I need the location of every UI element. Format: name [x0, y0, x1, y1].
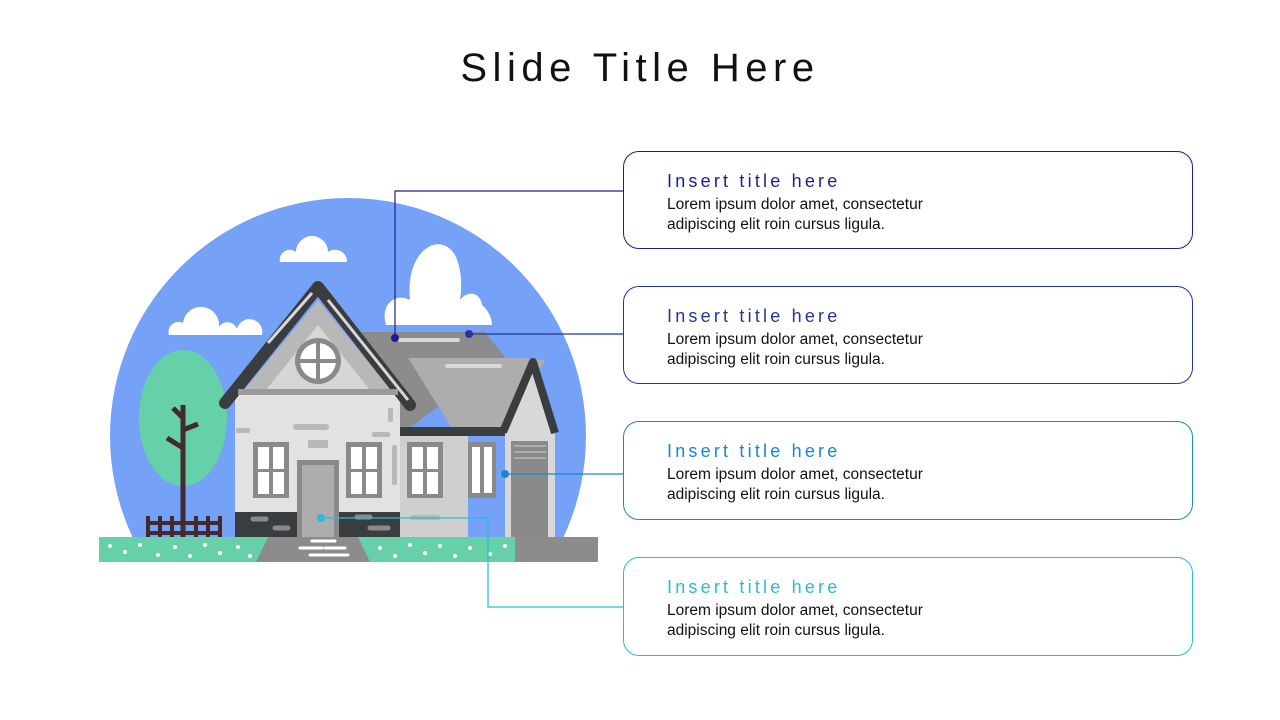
panel 4: adipiscing elit roin cursus ligula. [667, 622, 885, 638]
title: Slide Title Here [460, 46, 820, 90]
windows [253, 442, 443, 498]
ground [99, 537, 598, 562]
panel 4 [623, 557, 1193, 656]
panel 1: Insert title here [667, 171, 840, 191]
connector lines [321, 191, 623, 607]
panel 2 [623, 286, 1193, 384]
clouds [169, 236, 492, 335]
tree [139, 350, 227, 537]
panel 2: adipiscing elit roin cursus ligula. [667, 350, 885, 368]
panel 3 [623, 421, 1193, 520]
panel 1: Lorem ipsum dolor amet, consectetur [667, 196, 923, 213]
panel 4: Insert title here [667, 577, 840, 597]
panel 4: Lorem ipsum dolor amet, consectetur [667, 602, 923, 619]
base and door [235, 512, 400, 537]
back roof [360, 332, 505, 435]
house illustration [99, 190, 623, 608]
middle wall [400, 433, 468, 537]
panel 2: Insert title here [667, 306, 840, 326]
panel 1 [623, 151, 1193, 249]
main wall [235, 395, 400, 537]
panel 1: adipiscing elit roin cursus ligula. [667, 216, 885, 232]
garage section [505, 372, 555, 537]
panel 2: Lorem ipsum dolor amet, consectetur [667, 331, 923, 348]
panel 3: Lorem ipsum dolor amet, consectetur [667, 466, 923, 483]
fence [146, 516, 222, 537]
panel 3: Insert title here [667, 441, 840, 461]
panel 3: adipiscing elit roin cursus ligula. [667, 486, 885, 502]
sky circle [110, 198, 586, 537]
